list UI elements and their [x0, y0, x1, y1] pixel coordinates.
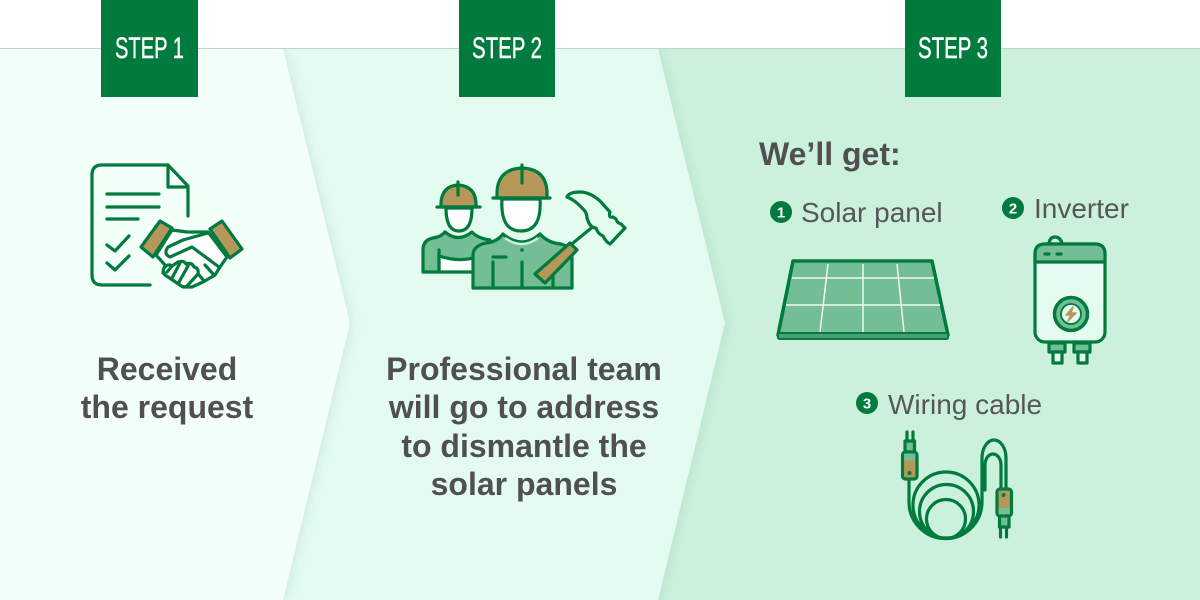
icon: solar panel: [778, 261, 948, 339]
text: step 1 description: [81, 351, 254, 425]
left plug: [902, 432, 917, 479]
label: inverter: Inverter: [1034, 193, 1129, 224]
tab: step 2: [459, 0, 555, 97]
tab: step 1: STEP 1: [115, 32, 184, 65]
text: step 2 description: [386, 351, 662, 502]
text: step 2 description: to dismantle the: [401, 428, 647, 464]
tab: step 3: [905, 0, 1001, 97]
icon: wiring cable: [902, 432, 1012, 538]
tab: step 2: STEP 2: [472, 32, 542, 65]
large worker: [473, 165, 572, 288]
icon: workers with hammer: [423, 165, 625, 288]
tab: step 1: [101, 0, 198, 97]
label: inverter: 2: [1009, 200, 1017, 218]
label: solar panel: 1: [777, 204, 785, 222]
small worker: [423, 182, 490, 273]
panel: step 1 chevron: [0, 49, 350, 600]
text: step 1 description: the request: [81, 389, 254, 425]
panel: step 2 chevron: [0, 49, 725, 600]
tab: step 3: STEP 3: [918, 32, 988, 65]
icon: inverter: [1035, 237, 1105, 363]
label: wiring cable: Wiring cable: [888, 389, 1042, 420]
text: step 2 description: Professional team: [386, 351, 662, 387]
text: step 2 description: solar panels: [431, 466, 617, 502]
text: step 1 description: Received: [97, 351, 237, 387]
text: step 2 description: will go to address: [388, 389, 659, 425]
icon: document and handshake: [92, 165, 242, 287]
label: solar panel: Solar panel: [801, 197, 943, 228]
label: wiring cable: 3: [863, 396, 871, 412]
hammer: [535, 192, 625, 283]
right plug: [997, 489, 1012, 537]
heading: we'll get: We’ll get:: [759, 136, 901, 172]
